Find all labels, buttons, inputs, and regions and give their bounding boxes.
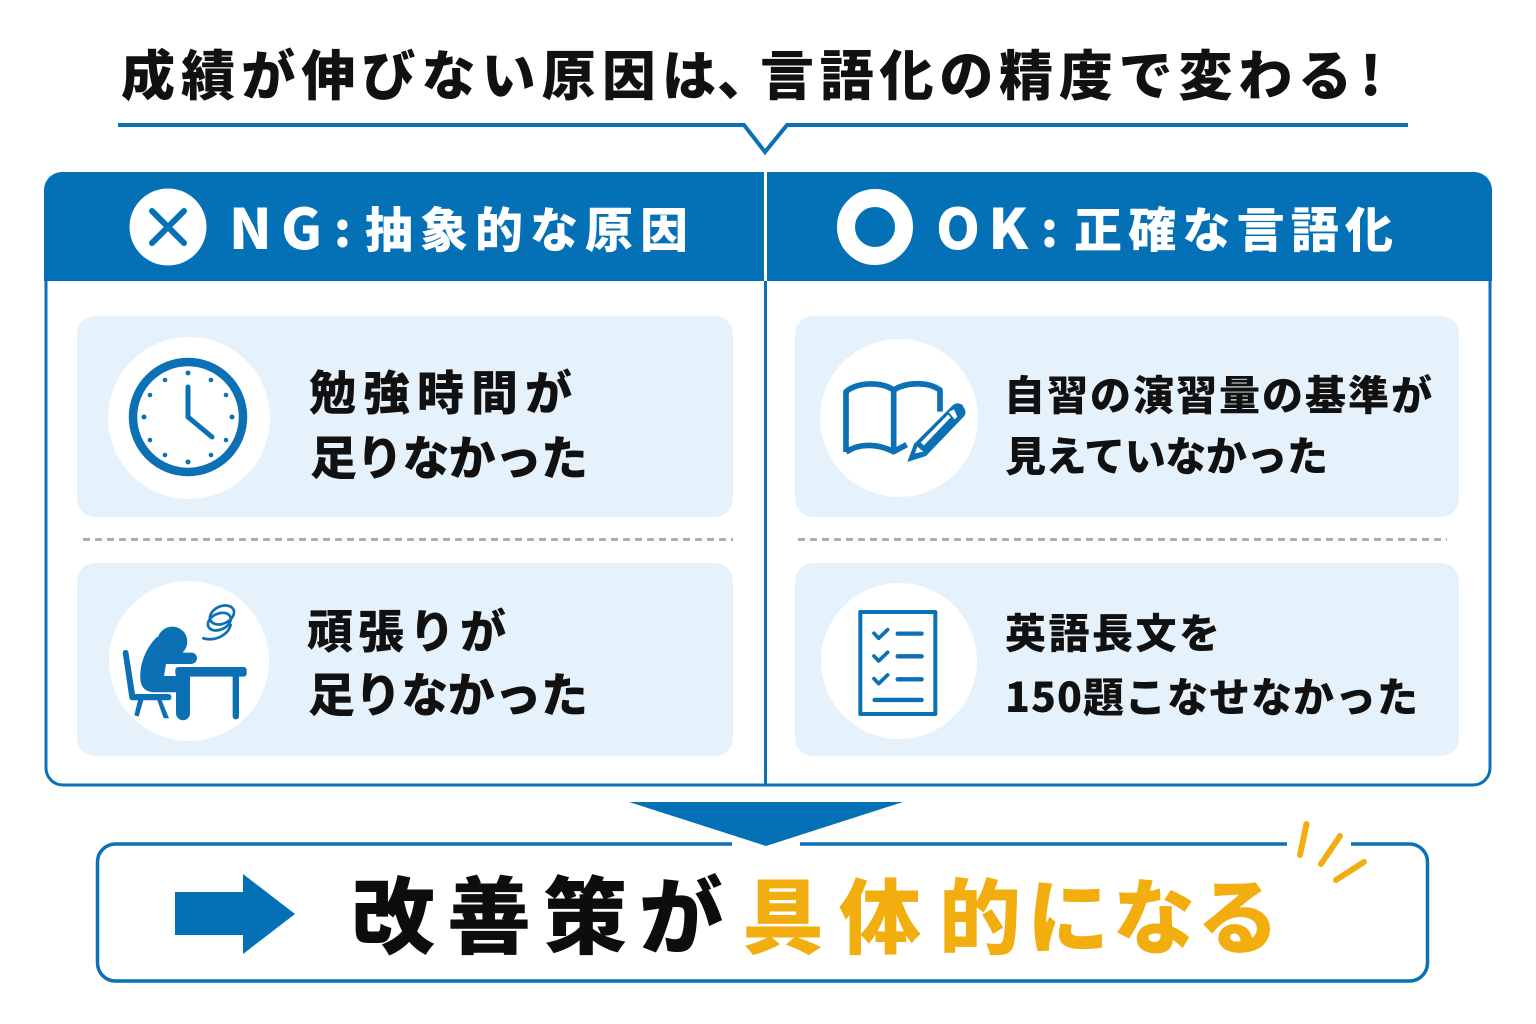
NG header <box>130 185 688 266</box>
NG heading: 抽象的な原因 <box>365 191 688 261</box>
panel: comparison table <box>44 172 1492 785</box>
result text: 具体的になる <box>742 852 1279 971</box>
dashed separator left <box>83 538 733 541</box>
card text <box>1005 600 1418 724</box>
card: study time <box>77 316 733 517</box>
dashed separator right <box>798 538 1447 541</box>
title underline with chevron <box>118 125 1408 152</box>
card: long passages <box>795 563 1459 756</box>
card text <box>307 596 588 726</box>
icon: cross <box>130 188 206 266</box>
title: 言語化の精度で変わる <box>760 32 1352 111</box>
title: ! <box>1360 32 1381 111</box>
card: self-study <box>795 316 1459 517</box>
icon: person slumped at desk <box>109 581 269 741</box>
result box <box>98 802 1428 981</box>
card text: 見えていなかった <box>1005 423 1328 483</box>
card: effort <box>77 563 733 756</box>
card text: 頑張りが <box>307 596 506 662</box>
top border gaps <box>732 838 1351 850</box>
arrow: right <box>175 874 295 954</box>
panel header band <box>44 172 1492 281</box>
title <box>121 32 1381 111</box>
card text: 足りなかった <box>308 657 588 726</box>
NG heading: : <box>334 191 351 261</box>
OK heading: : <box>1041 191 1058 261</box>
card text <box>309 355 588 489</box>
card text: 自習の演習量の基準が <box>1004 362 1432 422</box>
result text: 改善策が <box>351 851 723 972</box>
card text: 勉強時間が <box>309 355 572 424</box>
OK heading: 正確な言語化 <box>1074 191 1393 261</box>
centre divider <box>764 172 767 785</box>
title: 成績が伸びない原因は <box>121 32 716 111</box>
icon: clock <box>108 337 270 499</box>
icon: circle <box>846 198 904 256</box>
card text: 足りなかった <box>310 420 588 489</box>
icon: emphasis burst <box>1300 824 1364 880</box>
panel frame <box>46 174 1490 785</box>
NG heading <box>229 185 688 266</box>
card text: 英語長文を <box>1005 600 1220 660</box>
card text: 150題こなせなかった <box>1005 664 1418 724</box>
result text <box>351 851 1279 972</box>
icon: checklist <box>821 583 977 739</box>
OK heading <box>936 185 1393 266</box>
NG heading: NG <box>229 185 322 266</box>
icon: book and pencil <box>820 339 978 497</box>
arrow: down triangle <box>629 802 903 846</box>
title: 、 <box>717 32 771 111</box>
OK heading: OK <box>936 185 1029 266</box>
card text <box>1004 362 1432 483</box>
OK header <box>846 185 1393 266</box>
